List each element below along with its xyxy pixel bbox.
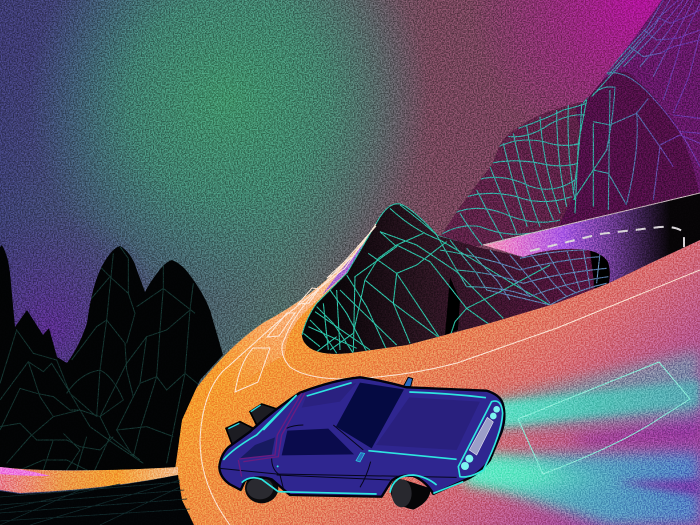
left black mountains (0, 245, 223, 470)
ground grid (0, 475, 194, 525)
roof antenna (403, 377, 413, 387)
lower beam fan (465, 452, 700, 525)
side mirror (356, 453, 365, 462)
purple side stripe (238, 393, 305, 477)
front grille (469, 417, 493, 455)
left mountain wire mesh (0, 247, 213, 473)
windshield (336, 383, 404, 448)
side window (282, 429, 354, 455)
beam lane marker outline (518, 362, 690, 474)
rear panel (240, 437, 275, 458)
front mountain rim (302, 204, 437, 335)
car (219, 377, 504, 510)
lower beam core (465, 456, 640, 490)
headlights (461, 406, 500, 470)
outer lane line (200, 224, 376, 525)
strip pink highlight (0, 467, 50, 476)
bonnet panel (376, 397, 480, 450)
purple streak inside fan (615, 479, 700, 496)
back road edge highlight (483, 193, 700, 245)
car body (219, 377, 504, 497)
front wireframe mountain (302, 204, 610, 354)
back road centre line (530, 227, 684, 252)
body crease lines (220, 425, 457, 488)
purple sliver beside the climbing road (322, 241, 366, 295)
upper beam core (485, 380, 700, 428)
front wheel (391, 479, 431, 510)
door handle dot (277, 465, 279, 467)
road highlight near summit (215, 212, 383, 395)
cyan trim lines (223, 383, 503, 494)
rear wireframe mountain (430, 0, 700, 250)
rear fins (226, 404, 280, 447)
road lane lines (200, 224, 700, 525)
lane dash outlines (235, 348, 270, 392)
back road: pink, purple and black stretch (483, 193, 700, 283)
inner lane line (282, 226, 700, 379)
rear wheel (245, 473, 278, 503)
upper beam halo (490, 350, 700, 432)
headlight beams (465, 350, 700, 525)
roof panel (302, 383, 357, 408)
purple band between beams (570, 418, 700, 446)
left road strip (0, 467, 178, 493)
main road: orange to purple sweep (175, 212, 700, 525)
